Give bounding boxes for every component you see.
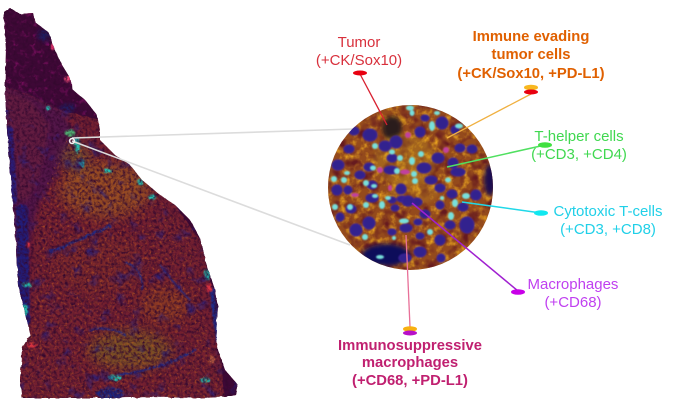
- label: macrophages: Macrophages: [528, 276, 618, 293]
- label: immune evading tumor cells: (+CK/Sox10, +PD-L1): [457, 66, 605, 82]
- blue vessel bands: [9, 130, 218, 375]
- label: tumor: Tumor: [338, 34, 380, 51]
- label: cytotoxic T-cells: Cytotoxic T-cells: [554, 203, 662, 220]
- dark regions: [362, 116, 496, 266]
- label: immunosuppressive macrophages: Immunosuppressive: [338, 338, 482, 354]
- marker: immune evading tumor cells: [524, 85, 538, 94]
- marker: macrophages: [511, 289, 525, 295]
- label: immunosuppressive macrophages: (+CD68, +PD-L1): [352, 373, 468, 389]
- callout lines: [360, 74, 545, 327]
- magenta highlights: [351, 132, 449, 197]
- marker: tumor: [353, 70, 367, 76]
- orange and gold mottling on lobe: [59, 162, 151, 218]
- label: cytotoxic T-cells: (+CD3, +CD8): [560, 221, 656, 238]
- label: immunosuppressive macrophages: macrophages: [362, 355, 458, 371]
- marker: cytotoxic T-cells: [534, 210, 548, 216]
- label: macrophages: (+CD68): [544, 294, 602, 311]
- zoom connector lines: [70, 129, 353, 245]
- magnified cell circle: [325, 102, 497, 274]
- tissue grain: [22, 136, 222, 398]
- blue nuclei: [332, 115, 481, 262]
- upper dark magenta tissue zone: [0, 0, 240, 400]
- purple-red left lobe: [0, 85, 76, 300]
- label: immune evading tumor cells: Immune evading: [473, 29, 589, 45]
- fine dark speckle: [0, 0, 245, 405]
- label: T-helper cells: T-helper cells: [534, 128, 624, 145]
- cyan hot spots: [22, 106, 210, 382]
- dark blue network: [0, 110, 245, 405]
- label: T-helper cells: (+CD3, +CD4): [531, 146, 627, 163]
- cyan and green T-cells: [331, 106, 470, 259]
- marker: immunosuppressive macrophages: [403, 326, 417, 336]
- marker: T-helper cells: [538, 142, 552, 148]
- tissue section: [0, 0, 245, 405]
- label: immune evading tumor cells: tumor cells: [492, 47, 570, 63]
- label: tumor: (+CK/Sox10): [316, 52, 402, 69]
